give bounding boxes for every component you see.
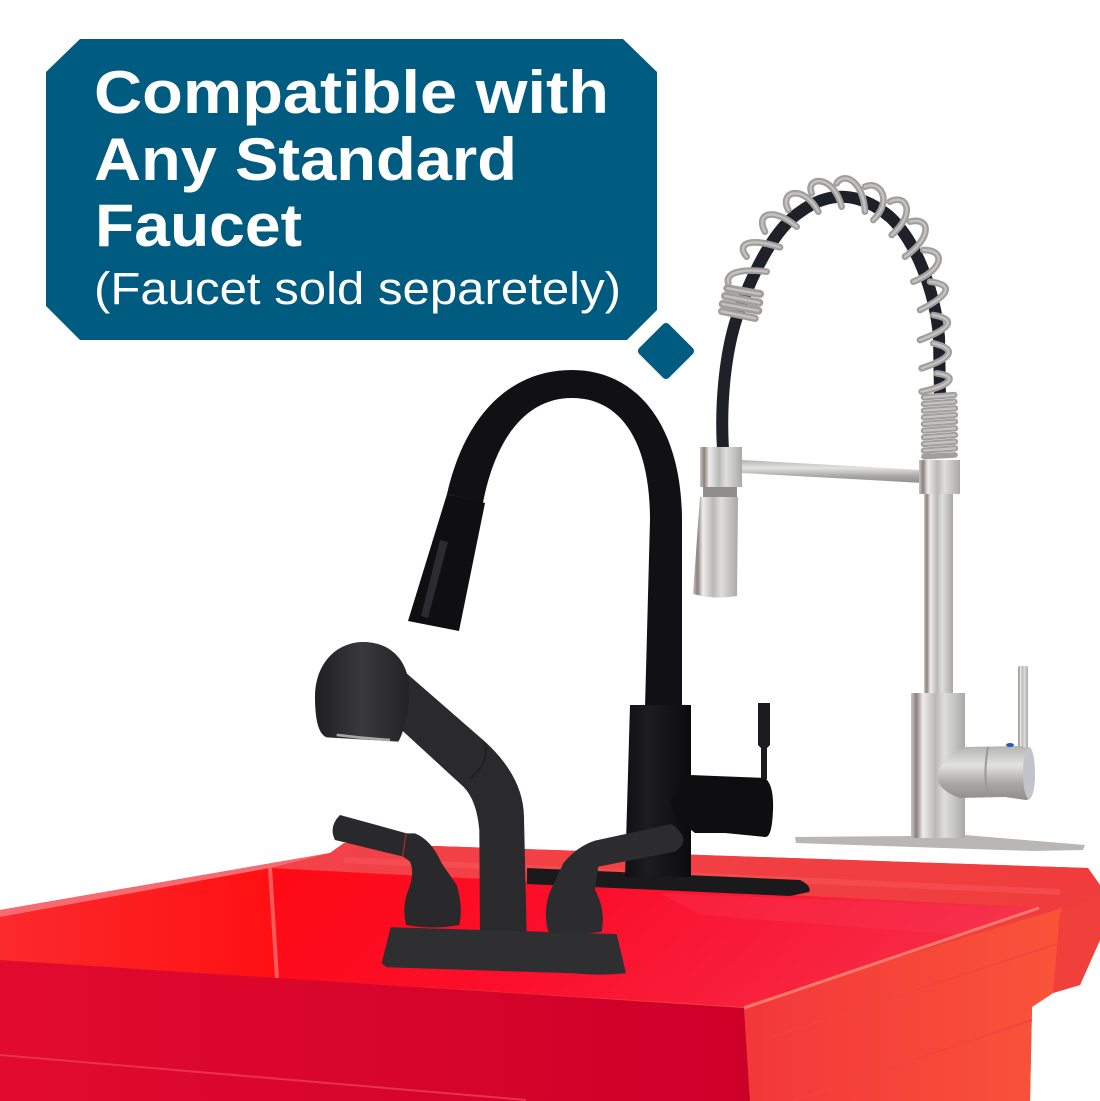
lever <box>758 703 770 779</box>
deck plate <box>527 868 810 896</box>
black gooseneck faucet <box>408 370 810 896</box>
callout box <box>46 39 657 340</box>
deck plate <box>795 835 1085 851</box>
gooseneck spout <box>447 370 682 708</box>
utility sink <box>0 843 1100 1101</box>
sink right face <box>744 908 1062 1101</box>
spring coils <box>722 178 955 457</box>
faucet base <box>911 693 965 838</box>
spray neck <box>703 487 737 499</box>
sink basin back wall <box>270 868 1039 1007</box>
sink right flange <box>1053 895 1100 993</box>
sink left rim <box>0 853 330 917</box>
sink silhouette <box>0 843 1100 1101</box>
spray head <box>315 642 409 742</box>
black hose <box>722 197 940 450</box>
barrel end cap <box>1023 747 1035 799</box>
spout tube <box>402 673 527 933</box>
callout note: (Faucet sold separetely) <box>94 263 621 314</box>
cold indicator dot <box>1006 743 1014 747</box>
spray head <box>693 497 738 598</box>
pull-down spray head <box>408 494 485 631</box>
right collar <box>919 460 960 494</box>
sink rear deck <box>270 843 1100 920</box>
matte black foreground faucet <box>315 642 683 975</box>
callout diamond <box>636 321 696 381</box>
right handle <box>546 824 683 934</box>
handle lever <box>1018 666 1028 750</box>
sink basin left wall <box>0 868 277 978</box>
callout heading: Faucet <box>95 192 302 259</box>
mixer barrel <box>671 775 773 837</box>
callout background <box>46 39 657 340</box>
callout heading: Any Standard <box>94 126 517 193</box>
sink front face <box>0 960 750 1101</box>
left handle <box>333 815 461 927</box>
handle barrel <box>937 746 1035 800</box>
callout heading <box>94 59 609 259</box>
left collar <box>700 447 742 487</box>
connector bar <box>742 460 923 483</box>
vertical column <box>924 494 953 694</box>
spout joint <box>470 743 486 778</box>
base plate <box>382 927 626 975</box>
sink back wall highlight <box>660 893 1039 935</box>
barrel seam <box>986 747 988 797</box>
base body <box>625 705 691 877</box>
stainless spring faucet <box>693 178 1085 851</box>
callout heading: Compatible with <box>94 59 609 126</box>
